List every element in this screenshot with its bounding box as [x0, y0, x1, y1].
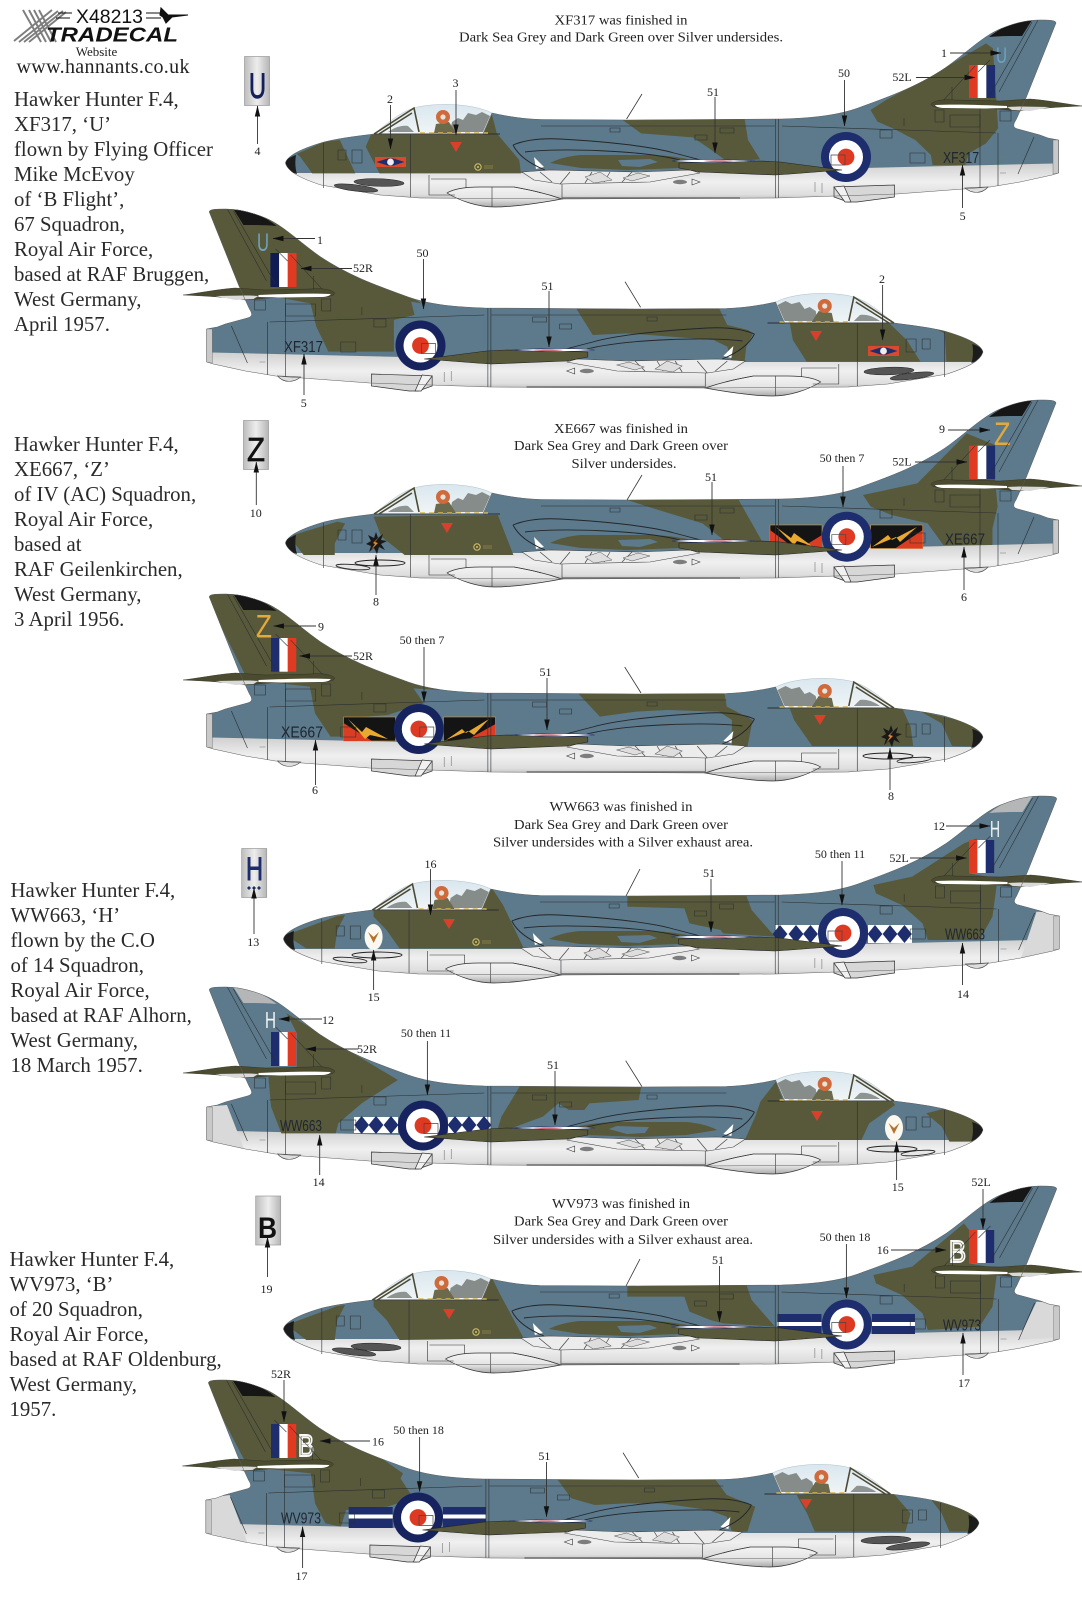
- callouts: aircraft 6: 50 then 11: [401, 1026, 451, 1040]
- website url: www.hannants.co.uk: [16, 56, 190, 78]
- nose letter chip B: 19: [260, 1282, 272, 1296]
- note: XF317 finish: Dark Sea Grey and Dark Green over Silver undersides.: [459, 30, 783, 46]
- paint scheme: [208, 1380, 979, 1559]
- structure: [183, 209, 983, 396]
- callouts: aircraft 8: 50 then 18: [393, 1423, 444, 1437]
- nose letter chip U: 4: [254, 144, 260, 158]
- callouts: aircraft 4: 52R: [353, 649, 373, 663]
- red badge: [443, 919, 455, 929]
- note: WV973 finish: WV973 was finished in: [552, 1197, 690, 1212]
- callouts: aircraft 1: [387, 46, 1001, 223]
- fin letter: U: [257, 229, 269, 257]
- description: XE667: Royal Air Force,: [14, 508, 153, 531]
- description: WW663: West Germany,: [10, 1029, 138, 1052]
- callouts: aircraft 6: 12: [322, 1013, 334, 1027]
- paint scheme: [283, 1186, 1058, 1365]
- callouts: aircraft 4: 6: [312, 783, 318, 797]
- structure: [183, 594, 983, 781]
- callouts: aircraft 8: 17: [296, 1569, 308, 1583]
- nose letter chip H: H: [246, 851, 263, 887]
- squadron lightning panel left: [344, 717, 396, 741]
- description: WW663: based at RAF Alhorn,: [10, 1004, 192, 1027]
- note: XE667 finish: XE667 was finished in: [554, 422, 688, 437]
- callouts: aircraft 7: 50 then 18: [820, 1230, 870, 1244]
- tail flash: [271, 638, 296, 672]
- roundel: [818, 908, 868, 958]
- pointer lines for right-facing aircraft: [623, 282, 642, 1478]
- logo: Xtradecal X48213: [14, 7, 188, 46]
- callouts: aircraft 7: 52L: [971, 1175, 991, 1189]
- red badge: [443, 1309, 455, 1319]
- note: WW663 finish: Silver undersides with a Silver exhaust area.: [493, 836, 753, 850]
- aircraft 7: WV973 left side: [283, 1186, 1082, 1374]
- callouts: aircraft 3: 8: [373, 595, 379, 609]
- description: XE667: of IV (AC) Squadron,: [14, 483, 196, 506]
- tail flash: [969, 65, 995, 98]
- callouts: aircraft 1: 52L: [892, 70, 912, 84]
- diamond bars: [773, 925, 912, 943]
- roundel: [822, 512, 872, 562]
- roundel: [396, 320, 446, 370]
- description: XE667: RAF Geilenkirchen,: [14, 558, 183, 581]
- nose letter chip Z: Z: [247, 431, 265, 468]
- description: XF317: based at RAF Bruggen,: [14, 263, 209, 286]
- structure: [283, 796, 1082, 983]
- callouts: aircraft 5: 15: [368, 990, 380, 1004]
- hollow gun blisters: [336, 560, 405, 571]
- description: WW663: Hawker Hunter F.4,: [10, 879, 175, 902]
- description: WV973: WV973, ‘B’: [10, 1273, 113, 1296]
- serial: WV973: [281, 1510, 321, 1528]
- nose letter chip H: 13: [247, 935, 259, 949]
- red badge: [811, 1111, 823, 1121]
- stencil marks: [475, 164, 493, 170]
- callouts: aircraft 5: 51: [703, 866, 715, 880]
- note: WW663 finish: WW663 was finished in: [550, 800, 692, 815]
- callouts: aircraft 4: [274, 620, 894, 803]
- description: WV973: based at RAF Oldenburg,: [10, 1348, 222, 1371]
- description: XF317: Mike McEvoy: [14, 163, 135, 186]
- aircraft 8: WV973 right side: [182, 1380, 980, 1568]
- nose letter chip Z: [244, 420, 268, 520]
- nose letter chip U: U: [249, 67, 266, 106]
- description: XF317: 67 Squadron,: [14, 213, 125, 236]
- callouts: aircraft 7: [712, 1175, 991, 1390]
- paint scheme: [285, 400, 1057, 579]
- callouts: aircraft 5: 12: [933, 819, 945, 833]
- callouts: aircraft 3: 50 then 7: [820, 451, 864, 465]
- note: XE667 finish: [514, 422, 728, 500]
- callouts: aircraft 3: [373, 422, 990, 609]
- description: XE667: [14, 433, 196, 631]
- description: WV973: Royal Air Force,: [10, 1323, 149, 1346]
- note: XE667 finish: Dark Sea Grey and Dark Green over: [514, 439, 728, 454]
- gun blisters: [861, 1535, 930, 1552]
- callouts: aircraft 1: 2: [387, 92, 393, 106]
- callouts: aircraft 6: 52R: [357, 1042, 377, 1056]
- callouts: aircraft 1: 50: [838, 66, 850, 80]
- callouts: aircraft 1: 3: [452, 76, 458, 90]
- hollow gun blisters: [863, 753, 931, 764]
- callouts: aircraft 6: 51: [547, 1058, 559, 1072]
- serial: XF317: [943, 150, 979, 167]
- callouts: aircraft 1: 51: [707, 85, 719, 99]
- paint scheme: [208, 594, 983, 773]
- description: XF317: of ‘B Flight’,: [14, 188, 124, 211]
- tail flash: [969, 446, 995, 479]
- gun blisters: [864, 366, 934, 382]
- squadron bars: [349, 1507, 486, 1528]
- note: XE667 finish: Silver undersides.: [572, 457, 676, 472]
- fin letter: H: [990, 816, 1000, 842]
- nose letter chip Z: 10: [250, 506, 262, 520]
- callouts: aircraft 6: 14: [313, 1175, 325, 1189]
- callouts: aircraft 5: 14: [957, 987, 969, 1001]
- description: XF317: flown by Flying Officer: [14, 138, 213, 161]
- callouts: aircraft 1: 1: [941, 46, 947, 60]
- squadron badge: [868, 346, 899, 356]
- aircraft 6: WW663 right side: [183, 986, 984, 1174]
- roundel: [822, 1300, 872, 1350]
- callouts: aircraft 4: 50 then 7: [400, 633, 444, 647]
- callouts: aircraft 6: 15: [892, 1180, 904, 1194]
- description: WV973: Hawker Hunter F.4,: [10, 1248, 174, 1271]
- description: WV973: West Germany,: [10, 1373, 137, 1396]
- nose letter chip H: [242, 848, 267, 949]
- description: XF317: XF317, ‘U’: [14, 113, 111, 136]
- structure: [285, 400, 1082, 587]
- callouts: aircraft 1: 5: [960, 209, 966, 223]
- description: XE667: based at: [14, 533, 82, 556]
- callouts: aircraft 2: 5: [301, 396, 307, 410]
- tail flash: [271, 1424, 296, 1458]
- diamond bars: [354, 1116, 491, 1134]
- callouts: aircraft 8: 16: [372, 1435, 384, 1449]
- red badge: [814, 715, 826, 725]
- squadron badge: [375, 157, 406, 167]
- callouts: aircraft 7: 16: [877, 1243, 889, 1257]
- roundel: [821, 132, 871, 182]
- serial: WV973: [943, 1318, 981, 1334]
- callouts: aircraft 8: 52R: [271, 1367, 291, 1381]
- squadron lightning panel right: [871, 525, 923, 548]
- aircraft 5: WW663 left side: [283, 796, 1082, 984]
- aircraft 2: XF317 right side: [183, 208, 984, 396]
- red badge: [450, 142, 462, 152]
- product code: X48213: [76, 7, 143, 28]
- description: WV973: of 20 Squadron,: [10, 1298, 143, 1321]
- callouts: aircraft 8: [271, 1367, 550, 1583]
- tail flash: [969, 840, 994, 873]
- structure: [183, 987, 983, 1174]
- tail flash: [969, 1230, 994, 1263]
- description: XF317: April 1957.: [14, 313, 110, 336]
- red badge: [441, 523, 453, 533]
- callouts: aircraft 3: 9: [939, 422, 945, 436]
- description: WW663: 18 March 1957.: [10, 1054, 143, 1077]
- tail flash: [270, 253, 296, 287]
- hollow gun blisters: [867, 1146, 935, 1157]
- paint scheme: [208, 209, 983, 388]
- description: XF317: Royal Air Force,: [14, 238, 153, 261]
- roundel: [393, 1492, 443, 1542]
- serial: XF317: [284, 339, 323, 356]
- callouts: aircraft 2: 51: [542, 279, 554, 293]
- description: WW663: WW663, ‘H’: [10, 904, 120, 927]
- callouts: aircraft 6: [279, 1013, 904, 1194]
- callouts: aircraft 2: [273, 233, 885, 410]
- paint scheme: [208, 987, 983, 1166]
- note: WW663 finish: [493, 800, 753, 896]
- squadron emblem: [881, 725, 902, 747]
- callouts: aircraft 5: 50 then 11: [815, 847, 865, 861]
- note: XF317 finish: XF317 was finished in: [554, 14, 688, 28]
- red badge: [800, 1499, 812, 1509]
- aircraft 1: XF317 left side: [285, 20, 1082, 208]
- aircraft 4: XE667 right side: [183, 594, 984, 782]
- structure: [283, 1186, 1082, 1373]
- decorative speed lines and jet icon: [56, 8, 188, 23]
- gun blisters: [332, 1342, 401, 1358]
- callouts: aircraft 2: 1: [317, 233, 323, 247]
- description: XE667: XE667, ‘Z’: [14, 458, 110, 481]
- aircraft 3: XE667 left side: [285, 400, 1082, 588]
- serial: WW663: [280, 1118, 322, 1135]
- description: WW663: Royal Air Force,: [10, 979, 150, 1002]
- squadron crest: [885, 1115, 903, 1141]
- paint scheme: [283, 796, 1058, 975]
- note: WV973 finish: Dark Sea Grey and Dark Green over: [514, 1214, 728, 1230]
- callouts: aircraft 7: 51: [712, 1253, 724, 1267]
- paint scheme: [285, 20, 1057, 199]
- callouts: aircraft 5: 16: [424, 857, 436, 871]
- description: XE667: West Germany,: [14, 583, 142, 606]
- stencil marks: [473, 1329, 491, 1335]
- description: WV973: 1957.: [10, 1398, 56, 1421]
- callouts: aircraft 3: 6: [961, 590, 967, 604]
- fin letter: Z: [994, 416, 1011, 452]
- nose letter chip U: [244, 56, 270, 158]
- description: XE667: Hawker Hunter F.4,: [14, 433, 179, 456]
- description: XE667: 3 April 1956.: [14, 608, 124, 631]
- serial: XE667: [945, 532, 985, 548]
- callouts: aircraft 8: 51: [538, 1449, 550, 1463]
- note: XF317 finish: [459, 14, 783, 119]
- serial: WW663: [945, 926, 985, 944]
- description: WW663: of 14 Squadron,: [10, 954, 144, 977]
- stencil marks: [474, 544, 492, 550]
- structure: [182, 1380, 979, 1567]
- structure: [285, 20, 1082, 207]
- fin letter: B: [949, 1234, 966, 1269]
- nose letter chip B: B: [258, 1212, 277, 1245]
- description: XF317: Hawker Hunter F.4,: [14, 88, 179, 111]
- tail flash: [271, 1032, 296, 1066]
- callouts: aircraft 5: [368, 819, 990, 1004]
- description: WW663: flown by the C.O: [10, 929, 155, 952]
- description: WW663: [10, 879, 192, 1077]
- stencil marks: [473, 939, 491, 945]
- icon: striped X: [14, 10, 66, 42]
- squadron lightning panel right: [444, 717, 496, 741]
- fin letter: Z: [256, 608, 272, 644]
- callouts: aircraft 5: 52L: [889, 851, 909, 865]
- squadron crest: [365, 924, 383, 950]
- gun blisters: [334, 178, 404, 194]
- squadron emblem: [366, 532, 387, 554]
- fin letter: B: [298, 1428, 314, 1463]
- roundel: [398, 1100, 448, 1150]
- description: WV973: [10, 1248, 222, 1421]
- note: WV973 finish: Silver undersides with a Silver exhaust area.: [493, 1233, 753, 1248]
- callouts: aircraft 2: 2: [879, 272, 885, 286]
- squadron lightning panel left: [770, 525, 822, 548]
- serial: XE667: [281, 724, 323, 742]
- description: XF317: West Germany,: [14, 288, 142, 311]
- roundel: [394, 704, 444, 754]
- callouts: aircraft 2: 50: [416, 246, 428, 260]
- website label: Website: [76, 44, 118, 59]
- hollow gun blisters: [333, 952, 402, 964]
- callouts: aircraft 2: 52R: [353, 261, 373, 275]
- brand name: TRADECAL: [46, 24, 178, 46]
- fin letter: H: [265, 1007, 276, 1033]
- callouts: aircraft 7: 17: [958, 1376, 970, 1390]
- callouts: aircraft 3: 52L: [892, 455, 912, 469]
- fin letter: U: [996, 43, 1007, 68]
- note: WW663 finish: Dark Sea Grey and Dark Green over: [514, 818, 728, 833]
- note: WV973 finish: [493, 1197, 753, 1286]
- squadron bars: [778, 1314, 915, 1334]
- nose letter chip B: [256, 1196, 281, 1296]
- callouts: aircraft 3: 51: [705, 470, 717, 484]
- red badge: [810, 331, 822, 341]
- callouts: aircraft 4: 8: [888, 789, 894, 803]
- callouts: aircraft 4: 51: [540, 665, 552, 679]
- callouts: aircraft 4: 9: [318, 620, 324, 634]
- description: XF317: [14, 88, 213, 336]
